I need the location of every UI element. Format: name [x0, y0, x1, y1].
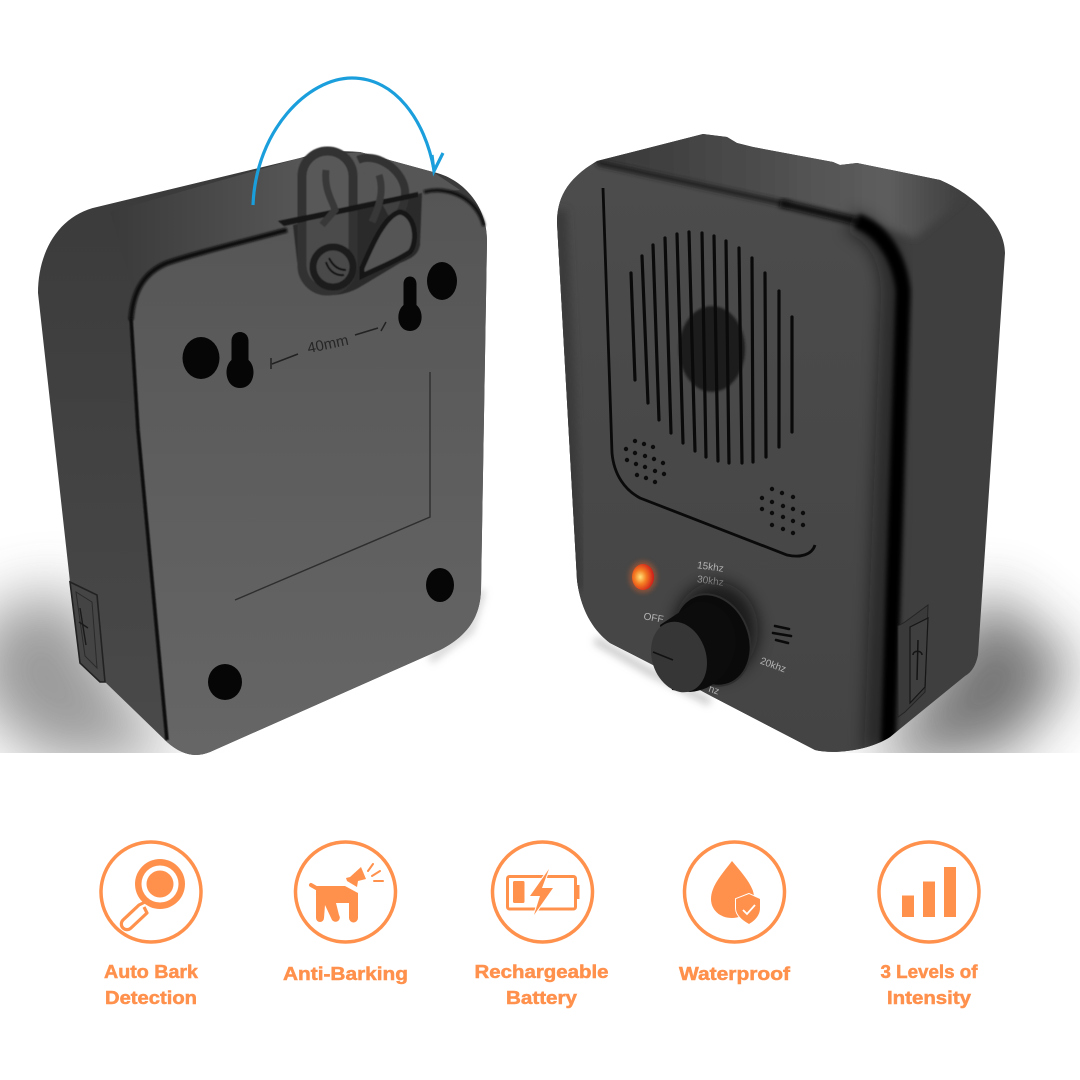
icon: magnifying glass	[121, 859, 185, 930]
dark band soft	[850, 222, 892, 750]
dial labels	[643, 560, 787, 697]
label: Battery	[506, 988, 577, 1008]
dial labels: hz	[707, 684, 720, 697]
speaker recess	[603, 188, 815, 556]
front top bevel	[594, 134, 964, 238]
dimension 40mm: 40mm	[306, 332, 350, 357]
dimension 40mm	[271, 322, 386, 369]
label: Waterproof	[679, 964, 791, 984]
feature: 3 levels of intensity	[879, 842, 979, 1008]
front body silhouette	[557, 134, 1005, 752]
label panel outline	[235, 372, 430, 600]
device: rear view with mounting holes	[38, 151, 487, 755]
icon: water drop with shield	[711, 861, 760, 924]
usb port front	[898, 605, 928, 717]
mounting holes	[182, 262, 457, 700]
feature: auto bark detection	[101, 842, 201, 1008]
icon: barking dog	[311, 864, 383, 922]
bevel shadow line	[597, 163, 790, 205]
label: Rechargeable	[474, 962, 608, 982]
dark band core	[857, 221, 903, 745]
red LED	[629, 561, 657, 593]
speaker dots right	[760, 487, 805, 535]
sound vent	[773, 626, 791, 643]
usb port rear	[70, 582, 105, 682]
dial labels: 30khz	[696, 574, 724, 589]
floor shadows	[0, 590, 1075, 770]
dial labels: 15khz	[696, 560, 724, 575]
rotation arrow	[253, 78, 443, 205]
device: front view with speaker	[557, 120, 1005, 760]
icon: signal bars	[902, 867, 956, 917]
label: Auto Bark	[104, 962, 199, 982]
icon: battery	[508, 869, 580, 915]
dial labels: OFF	[643, 611, 664, 626]
feature: waterproof	[679, 842, 791, 984]
label: Anti-Barking	[283, 964, 408, 984]
label: 3 Levels of	[880, 962, 979, 982]
speaker slots	[631, 232, 792, 463]
speaker centre	[679, 306, 745, 392]
feature: anti-barking	[283, 842, 408, 984]
frequency dial	[642, 582, 764, 700]
dial labels: 20khz	[758, 656, 787, 675]
left edge tone	[560, 210, 578, 590]
mounting clip ghost	[278, 151, 422, 295]
speaker dots left	[624, 439, 666, 484]
label: Detection	[105, 988, 197, 1008]
front face panel	[557, 163, 903, 760]
rear face panel	[131, 192, 487, 755]
label: Intensity	[887, 988, 971, 1008]
face edge line	[131, 230, 287, 320]
feature: rechargeable battery	[474, 842, 608, 1008]
top bevel	[110, 152, 460, 297]
rear body silhouette	[38, 151, 487, 755]
